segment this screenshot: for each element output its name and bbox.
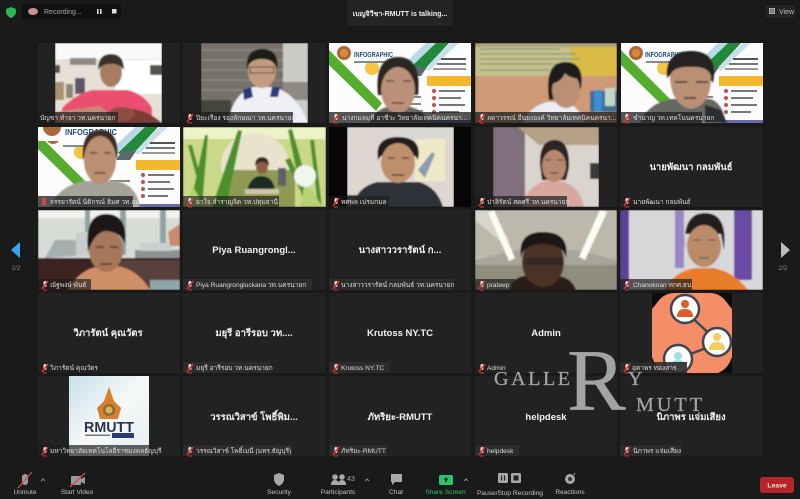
tile 19: Admin [487, 365, 506, 372]
button: reactions: Reactions [555, 489, 585, 496]
tile 18: Krutoss NY.TC [367, 328, 433, 339]
label: tile 14 [475, 279, 515, 290]
label: tile 6: จรรยารัตน์ นิติกรณ์ ธิมศ วท.ลม [50, 198, 140, 206]
label: tile 1 [38, 112, 118, 123]
tile 6 [38, 118, 180, 207]
arrow: previous page [11, 242, 21, 272]
tile 23: ภัทริยะ-RMUTT [341, 447, 386, 455]
tile 19: Admin [531, 328, 561, 339]
logo: RMUTT: RMUTT [84, 419, 134, 436]
bottom toolbar [13, 472, 794, 497]
tile 8 [329, 127, 471, 207]
tile 25: นิภาพร แจ่มเสียง [656, 411, 726, 423]
label: tile 3: นางกมลมุที อาชีวะ วิทยาลัยเทคนิคนครนา... [342, 114, 467, 122]
tile 10 [620, 127, 763, 207]
button: unmute [13, 472, 37, 496]
tile 22: วรรณวิสาข์ โพธิ์เมนี (มทร.ธัญบุรี) [196, 446, 291, 455]
tile 5: INFOGRAPHIC [645, 52, 684, 59]
recording indicator: Recording... [44, 9, 82, 16]
button: chat [389, 474, 403, 496]
label: tile 6 [38, 196, 140, 207]
button: leave [760, 477, 794, 493]
tile 12 [183, 210, 326, 290]
tile 24 [475, 376, 617, 456]
tile 18 [329, 293, 471, 373]
button: start video [61, 473, 94, 496]
tile 9 [475, 127, 617, 207]
button: leave: Leave [767, 482, 787, 490]
watermark: Gallery RMUTT: MUTT [636, 394, 702, 416]
label: tile 7: ยาใจ สำราญจิต วท.ปทุมธานี [196, 198, 279, 206]
button: participants [321, 474, 356, 496]
label: tile 20 [620, 362, 687, 373]
button: unmute: Unmute [13, 489, 37, 496]
tile 2 [183, 43, 326, 123]
button: chat: Chat [389, 489, 403, 496]
arrow: next page [778, 242, 790, 272]
button: security: Security [267, 489, 292, 496]
tile 11 [38, 210, 180, 290]
tile 24: helpdesk [525, 412, 567, 423]
label: tile 21 [38, 445, 162, 456]
talking indicator [347, 0, 453, 26]
tile 4 [475, 43, 617, 123]
icon: network avatars [652, 293, 732, 373]
tile 18: Krutoss NY.TC [341, 365, 384, 372]
watermark: Gallery RMUTT [494, 333, 702, 430]
label: tile 9 [475, 196, 569, 207]
talking indicator: เบญจิวีชา-RMUTT is talking... [353, 10, 447, 18]
carets [41, 479, 468, 481]
tile 19 [475, 293, 617, 373]
watermark: Gallery RMUTT: Y [628, 368, 642, 390]
label: tile 21: มหาวิทยาลัยเทคโนโลยีราชมงคลธัญบุรี [50, 447, 162, 455]
arrow: next page: 2/2 [778, 265, 788, 272]
tile 24: helpdesk [487, 448, 514, 455]
label: tile 20: อุดาพร ทองสาร [632, 365, 677, 372]
tile 22: วรรณวิสาข์ โพธิ์พิม... [210, 409, 298, 423]
label: tile 14: prateep [487, 282, 510, 289]
tile 7 [183, 127, 326, 207]
button: security [267, 473, 292, 496]
label: tile 5: ชำนาญ วท.เทคโนนครนายก [633, 114, 714, 122]
tile 12: Piya Ruangrongluckana วท.นครนายก [196, 282, 306, 289]
tile 17 [183, 293, 326, 373]
tile 17: มยุรี อารีรอบ วท.นครนายก [196, 364, 273, 372]
label: tile 9: ปาลิรัตน์ สดศรี วท.นครนายก [487, 198, 569, 206]
tile 14 [475, 210, 617, 290]
button: participants: Participants [321, 489, 356, 496]
label: tile 2: ปิยะเรือง รองลักษณา วท.นครนายก [196, 114, 296, 122]
tile 13 [329, 210, 471, 290]
tile 5 [620, 43, 763, 123]
tile 25: นิภาพร แจ่มเสียง [633, 447, 681, 455]
tile 6: INFOGRAPHIC [65, 128, 117, 137]
button: participants: 43 [347, 476, 355, 483]
tile 3: INFOGRAPHIC [354, 52, 393, 59]
tile 20 [620, 293, 763, 373]
tile 25 [620, 376, 763, 456]
view button: View [779, 9, 795, 16]
arrow: previous page: 2/2 [11, 265, 21, 272]
label: tile 7 [183, 196, 279, 207]
tile 17: มยุรี อารีรอบ วท.... [215, 327, 293, 339]
view button [765, 5, 795, 18]
tile 1 [38, 43, 180, 123]
tile 16: วิภารัตน์ คุณวัตร [50, 364, 98, 372]
tile 12: Piya Ruangrongl... [212, 245, 296, 256]
tile 10: นายพัฒนา กลมพันธ์ [649, 161, 733, 173]
label: tile 15: Chanoknan ทกศ.ธบ. [633, 282, 693, 289]
label: tile 15 [620, 279, 693, 290]
label: tile 11 [38, 279, 91, 290]
button: share screen: Share Screen [425, 489, 466, 496]
label: tile 4 [475, 112, 617, 123]
logo: RMUTT [69, 376, 149, 456]
label: tile 8: ทศพล เปรมกมล [341, 199, 386, 206]
label: tile 1: บัญชา ทำจา วท.นครนายก [40, 114, 116, 122]
button: reactions [555, 473, 585, 496]
label: tile 8 [329, 196, 389, 207]
tile 16 [38, 293, 180, 373]
icon: security shield [6, 7, 16, 18]
tile 3 [329, 43, 471, 123]
button: start video: Start Video [61, 489, 94, 496]
label: tile 5 [620, 112, 714, 123]
tile 13: นางสาววรารัตน์ กลมพันธ์ วท.นครนายก [341, 281, 454, 289]
watermark: Gallery RMUTT: R [567, 333, 626, 430]
recording indicator [22, 4, 121, 19]
button: pause stop recording [477, 473, 543, 497]
tile 23: ภัทริยะ-RMUTT [368, 412, 433, 423]
label: tile 3 [329, 112, 471, 123]
tile 16: วิภารัตน์ คุณวัตร [73, 327, 143, 339]
top status bar [6, 0, 795, 26]
tile 15 [620, 210, 763, 290]
tile 22 [183, 376, 326, 456]
watermark: Gallery RMUTT: GALLE [494, 368, 570, 390]
button: share screen [425, 475, 466, 496]
label: tile 4: ลดาวรรณ์ ยืนยงองค์ วิทยาลัยเทคนิคนครนา... [487, 114, 616, 122]
label: tile 11: ณัฐพงษ์ พันธ์ [50, 281, 86, 289]
tile 23 [329, 376, 471, 456]
tile 13: นางสาววรารัตน์ ก... [359, 244, 441, 256]
tile 10: นายพัฒนา กลมพันธ์ [633, 198, 691, 206]
tile 21 [38, 376, 180, 456]
button: pause stop recording: Pause/Stop Recording [477, 490, 543, 497]
label: tile 2 [183, 112, 296, 123]
